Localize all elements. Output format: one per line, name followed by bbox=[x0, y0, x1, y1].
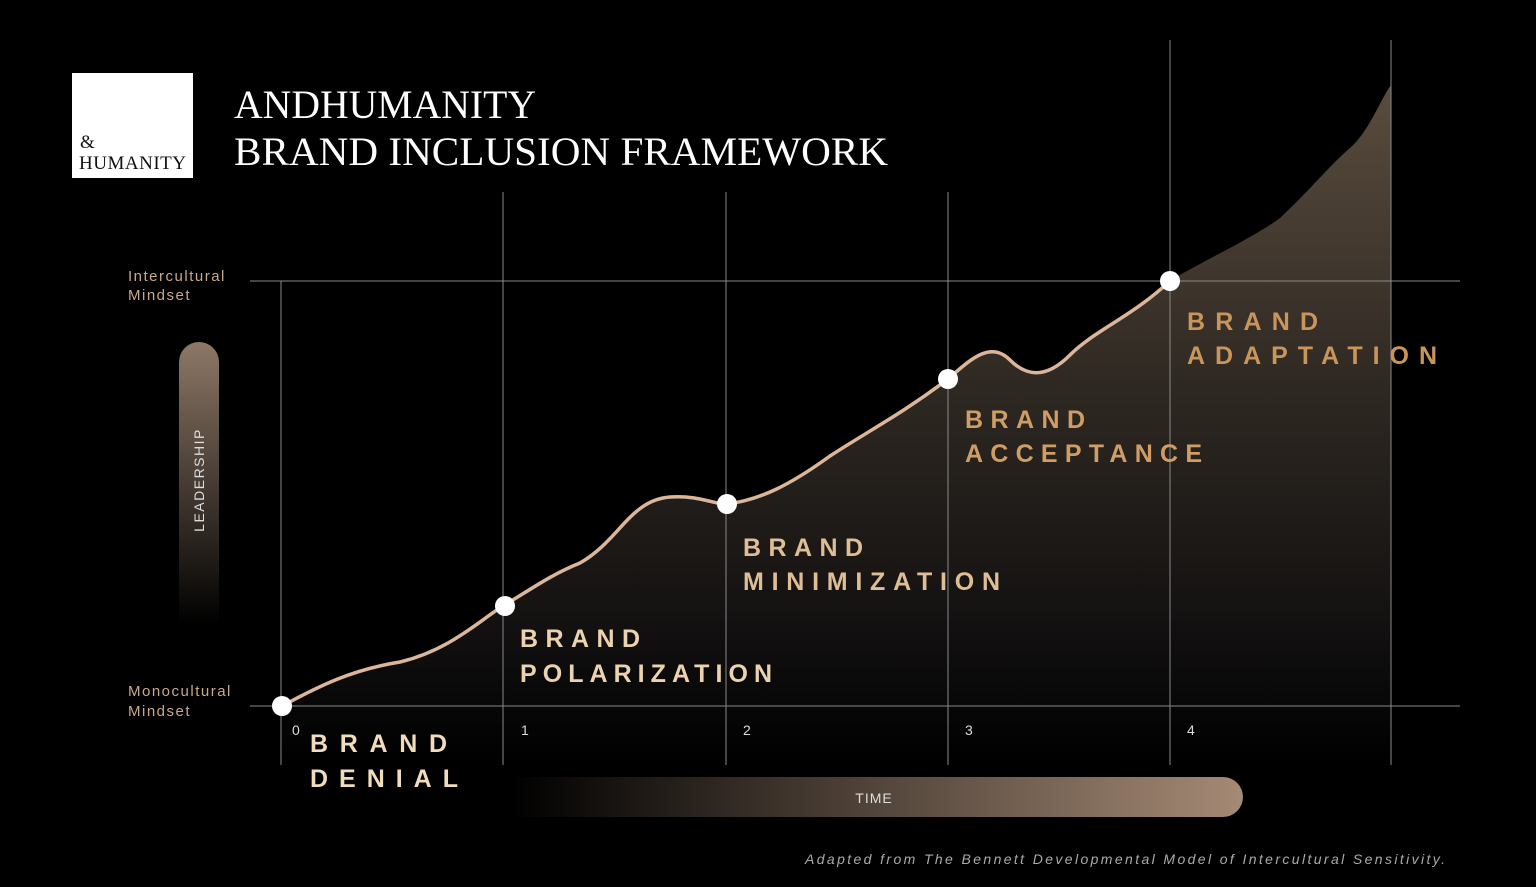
stage labels: ADAPTATION bbox=[1187, 342, 1437, 370]
logo: & bbox=[80, 132, 95, 153]
stage labels: POLARIZATION bbox=[520, 660, 772, 688]
tick numbers: 2 bbox=[743, 722, 751, 738]
title: ANDHUMANITY bbox=[234, 82, 536, 127]
time bar bbox=[510, 777, 1243, 817]
stage labels: BRAND bbox=[520, 625, 640, 653]
tick numbers: 4 bbox=[1187, 722, 1195, 738]
stage labels bbox=[310, 308, 1437, 793]
stage labels: ACCEPTANCE bbox=[965, 440, 1202, 468]
axis labels bbox=[128, 268, 232, 720]
stage labels: MINIMIZATION bbox=[743, 568, 1000, 596]
title bbox=[234, 82, 888, 174]
logo: HUMANITY bbox=[79, 153, 186, 174]
source note: Adapted from The Bennett Developmental Model of Intercultural Sensitivity. bbox=[804, 851, 1445, 867]
axis labels: Mindset bbox=[128, 703, 191, 720]
tick numbers: 3 bbox=[965, 722, 973, 738]
points bbox=[272, 271, 1180, 716]
stage labels: BRAND bbox=[1187, 308, 1318, 336]
curve bbox=[282, 281, 1170, 706]
tick numbers bbox=[292, 722, 1195, 738]
area chart fill bbox=[282, 85, 1391, 765]
axis labels: Monocultural bbox=[128, 683, 232, 700]
tick numbers: 1 bbox=[521, 722, 529, 738]
grid lines bbox=[250, 40, 1460, 765]
tick numbers: 0 bbox=[292, 722, 300, 738]
logo bbox=[72, 73, 193, 178]
stage labels: BRAND bbox=[743, 534, 863, 562]
axis labels: Mindset bbox=[128, 287, 191, 304]
leadership bar bbox=[179, 342, 219, 625]
time bar: TIME bbox=[855, 790, 893, 806]
leadership bar: LEADERSHIP bbox=[191, 428, 207, 532]
stage labels: BRAND bbox=[965, 406, 1085, 434]
stage labels: BRAND bbox=[310, 730, 447, 758]
title: BRAND INCLUSION FRAMEWORK bbox=[234, 129, 888, 174]
axis labels: Intercultural bbox=[128, 268, 226, 285]
stage labels: DENIAL bbox=[310, 765, 458, 793]
